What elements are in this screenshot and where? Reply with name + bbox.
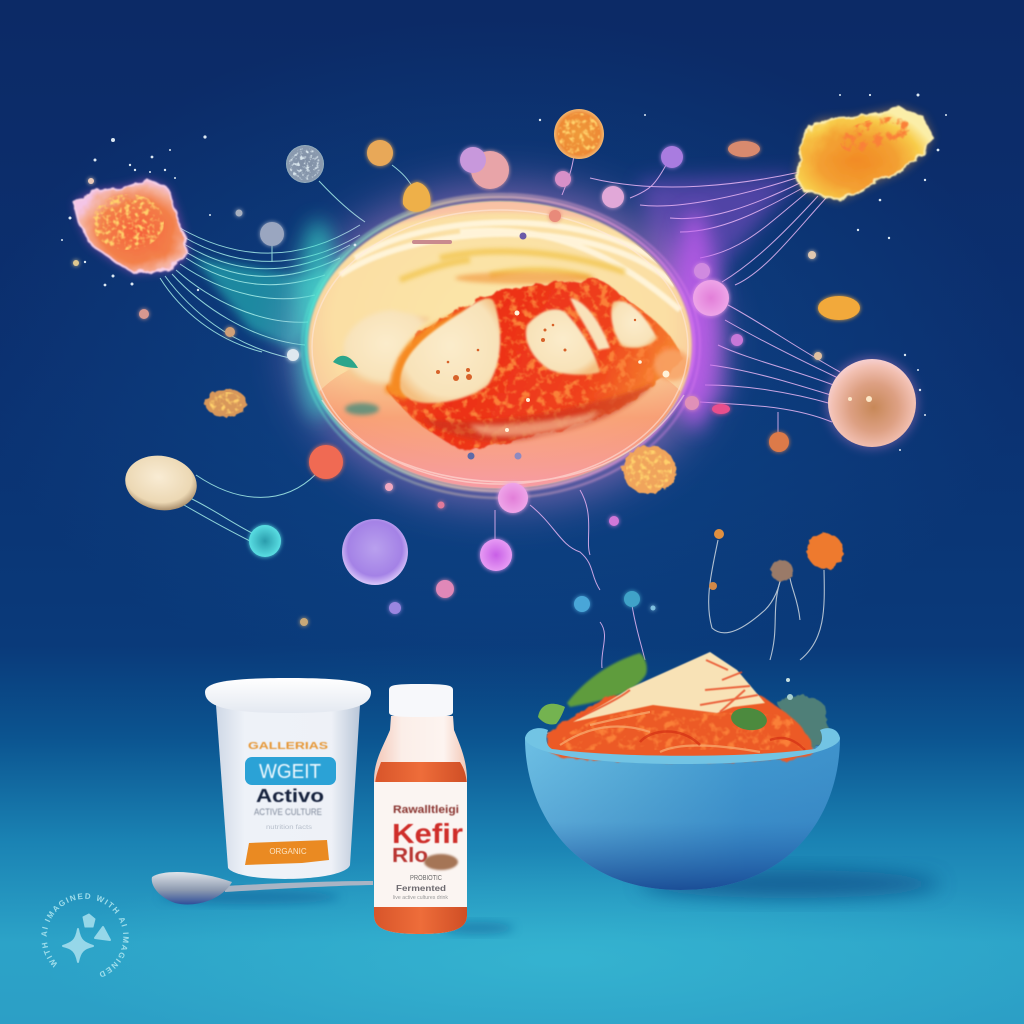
connector threads left: [160, 165, 412, 542]
kimchi heap: [545, 686, 812, 762]
yogurt tub: ORGANIC: [269, 847, 307, 856]
kefir bottle: PROBIOTIC: [410, 875, 442, 882]
lower pink belly: [320, 370, 680, 488]
microbe: orange dotted ball: [554, 109, 604, 159]
microbe: golden cluster right: [797, 108, 932, 200]
bottle body: [374, 716, 467, 934]
greens behind: [538, 653, 830, 748]
cap: [389, 684, 453, 717]
watermark badge: [41, 893, 129, 977]
microbe: large pink sphere: [826, 357, 918, 449]
bowl shadow: [640, 870, 940, 898]
microbe: lumpy tan clusters: [205, 389, 676, 494]
badge ring text: WITH AI IMAGINED WITH AI IMAGINED: [41, 893, 129, 977]
chili mottling: [388, 278, 682, 448]
purple and teal thread glows: [193, 175, 800, 410]
kefir bottle: Fermented: [396, 884, 446, 893]
bowl rim: [525, 728, 840, 764]
chili flakes: [436, 319, 636, 381]
cabbage layers top: [340, 222, 680, 310]
kefir bottle: Rawalltleigi: [393, 804, 459, 816]
orb glow halo: [293, 185, 717, 505]
lid: [205, 678, 371, 713]
small orange brand text: GALLERIAS: [248, 740, 328, 752]
stalked spore plants: [709, 529, 843, 660]
kimchi mottling: [555, 710, 805, 750]
central kimchi orb: [302, 185, 700, 498]
connector threads right: [495, 155, 840, 668]
bowl body: [525, 728, 840, 890]
kefir bottle: live active cultures drink: [393, 895, 449, 901]
microbe: red cluster left: [75, 180, 188, 272]
tub body: [216, 705, 360, 879]
yogurt tub: nutrition facts: [266, 825, 312, 831]
basil leaf: [730, 706, 768, 732]
yogurt tub: WGEIT: [259, 761, 321, 783]
blue label: [245, 757, 336, 785]
kefir bottle: Kefir: [392, 818, 463, 849]
yogurt tub: [205, 678, 371, 879]
microbe: teal dotted ball: [286, 145, 324, 183]
orange label: [245, 840, 329, 865]
small floating microbes: [73, 140, 860, 626]
small bead details: [520, 232, 526, 240]
kefir bottle: Rlo: [392, 845, 428, 867]
kefir bottle: [374, 684, 514, 934]
peach upper shell: [398, 202, 600, 225]
orb contour lines: [312, 210, 688, 484]
label Activo: Activo: [256, 786, 324, 806]
teal leaf accents: [333, 356, 358, 368]
badge pentagon: [83, 914, 95, 927]
sparkle particles: [61, 94, 947, 451]
spoon: [152, 872, 373, 904]
bowl inner shade: [532, 726, 832, 754]
orb rings: [302, 194, 700, 498]
microbe: violet sphere: [342, 519, 408, 585]
orange upper tint: [455, 272, 595, 284]
badge triangle: [95, 927, 110, 940]
napa cabbage leaf: [573, 652, 765, 722]
badge star: [63, 929, 93, 962]
bowl of kimchi: [525, 652, 940, 898]
bottle label: [374, 782, 467, 907]
bottle shadow: [442, 922, 514, 934]
sauce level: [375, 762, 467, 784]
red chili sauce: [388, 278, 682, 448]
fine print: ACTIVE CULTURE: [254, 807, 322, 817]
microbe: cream egg: [121, 450, 201, 516]
cabbage chunks: [400, 298, 500, 403]
red kimchi strands: [560, 712, 760, 752]
